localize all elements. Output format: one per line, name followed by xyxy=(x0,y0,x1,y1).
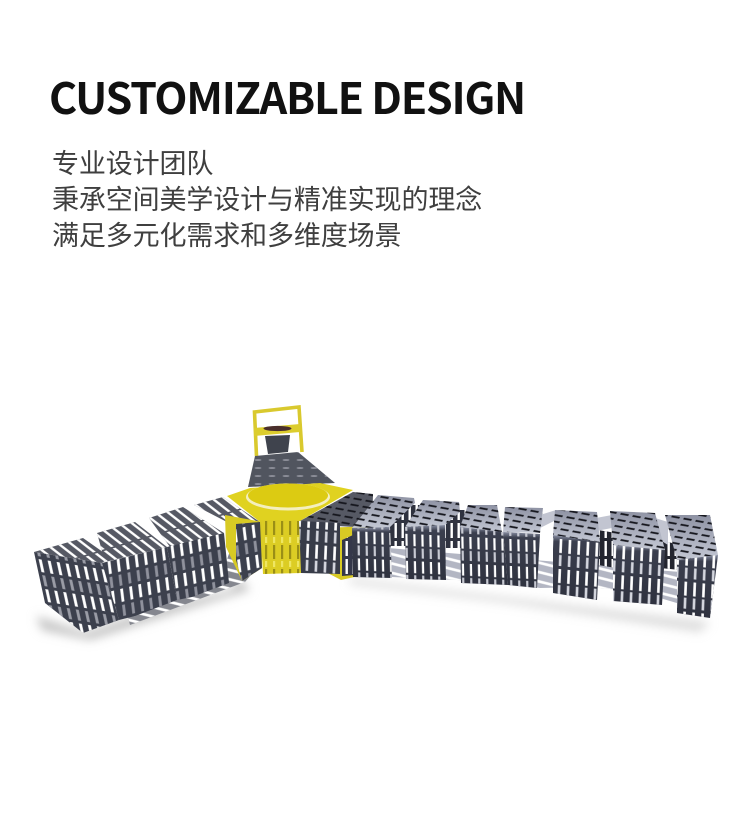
text block: design team description xyxy=(52,149,482,251)
text block: design team description: 秉承空间美学设计与精准实现的理念 xyxy=(52,185,482,215)
right arm: rear walls xyxy=(385,505,680,570)
text block: design team description: 满足多元化需求和多维度场景 xyxy=(52,221,401,251)
planter opening rim xyxy=(246,484,330,510)
right arm: module 0 xyxy=(299,492,373,580)
right arm: module 3b xyxy=(503,507,543,588)
right arm: module 6 xyxy=(665,515,718,618)
text block: design team description: 专业设计团队 xyxy=(52,149,213,179)
back module: yellow frame with planter xyxy=(254,407,302,456)
center module: yellow hub top xyxy=(227,483,353,522)
right arm: module 3 xyxy=(460,505,508,585)
left arm: module 2 xyxy=(97,522,177,620)
left arm: module 1 xyxy=(34,538,119,633)
right arm: floor slats xyxy=(388,548,680,604)
left arm: floor slats xyxy=(125,545,262,625)
left arm: module 4 xyxy=(194,497,262,581)
right arm: top connectors xyxy=(540,510,668,545)
planter opening xyxy=(248,484,328,508)
floor shadow xyxy=(36,578,710,640)
right arm: module 5 xyxy=(610,511,665,605)
title: CUSTOMIZABLE DESIGN xyxy=(49,65,525,127)
back module: perforated top xyxy=(248,452,335,487)
left arm: module 3 xyxy=(149,507,229,600)
right arm: module 1 xyxy=(352,495,415,578)
right arm: module 4 xyxy=(553,510,600,600)
right arm: module 2 xyxy=(405,500,460,580)
center module: yellow front panel xyxy=(260,520,301,574)
